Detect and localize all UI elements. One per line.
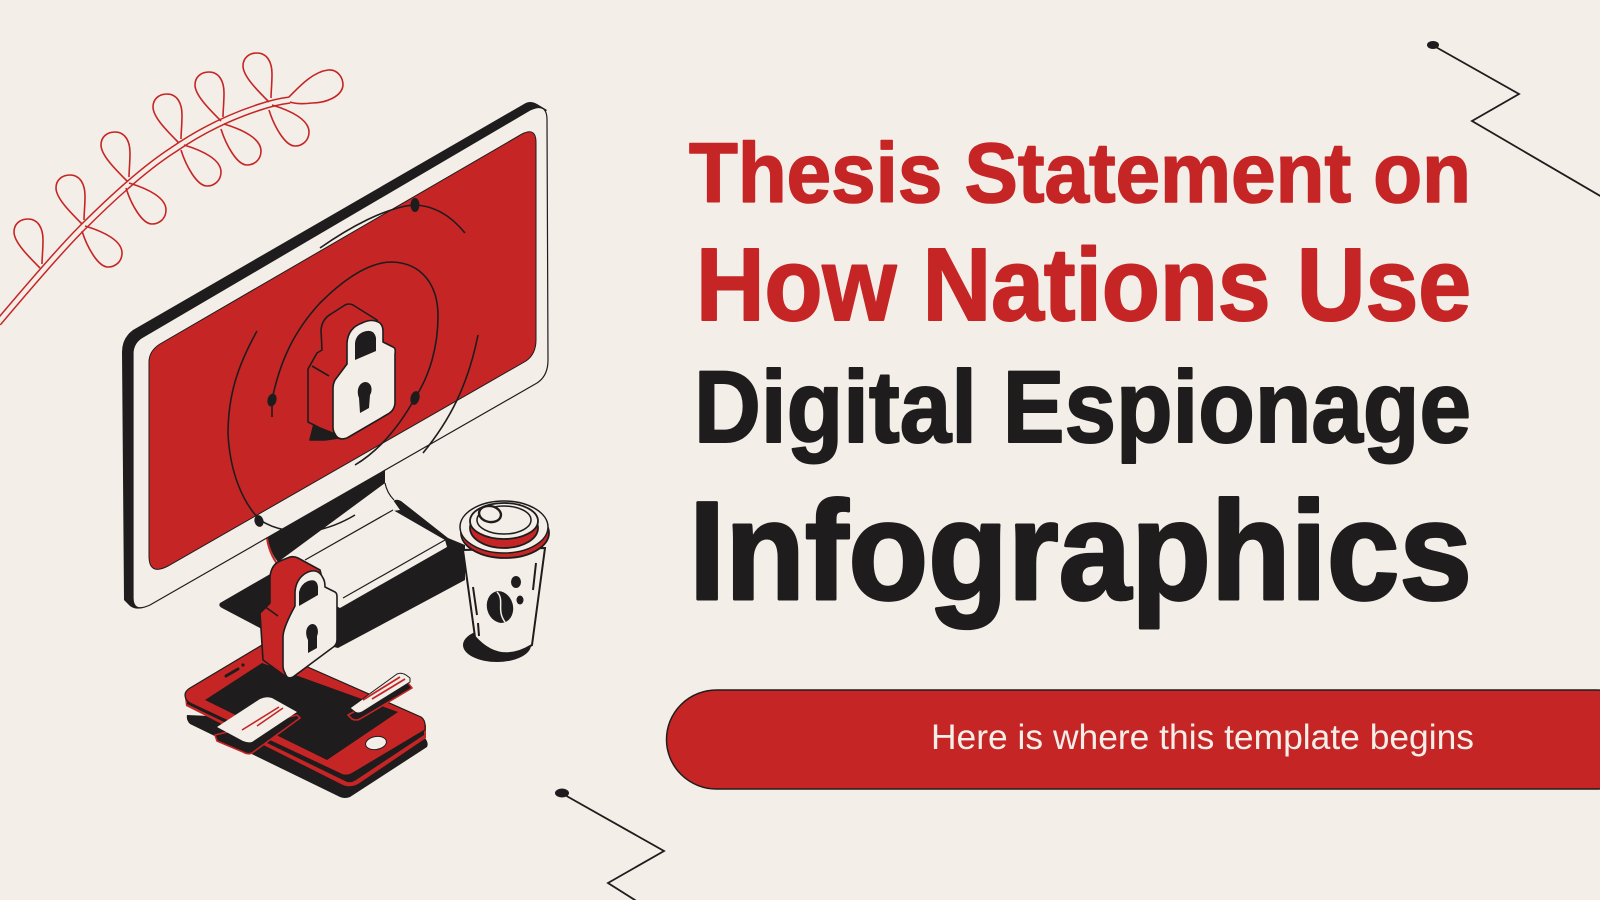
monitor stand and base [219, 455, 465, 648]
coffee bean logo [483, 576, 524, 626]
monitor body [122, 102, 548, 609]
message card small [348, 673, 412, 720]
smartphone [185, 645, 428, 798]
monitor screen [149, 132, 536, 569]
subtitle text: Here is where this template begins [931, 718, 1474, 757]
coffee cup [460, 501, 549, 662]
title line 3: Digital Espionage [694, 350, 1471, 464]
message card large [215, 697, 300, 754]
large padlock on screen [308, 304, 395, 440]
small padlock on phone [260, 557, 337, 678]
subtitle pill [666, 690, 1600, 789]
decoration: top-right zigzag line [1427, 41, 1600, 197]
illustration: isometric workstation [122, 102, 549, 798]
orbit lines and nodes [228, 198, 478, 532]
decoration: red leaf branch [0, 53, 343, 323]
cup shadow [463, 628, 531, 662]
title line 2: How Nations Use [696, 227, 1471, 342]
decoration: bottom zigzag line [555, 788, 664, 900]
title [689, 126, 1472, 629]
title line 4: Infographics [689, 472, 1472, 629]
title line 1: Thesis Statement on [689, 126, 1471, 220]
